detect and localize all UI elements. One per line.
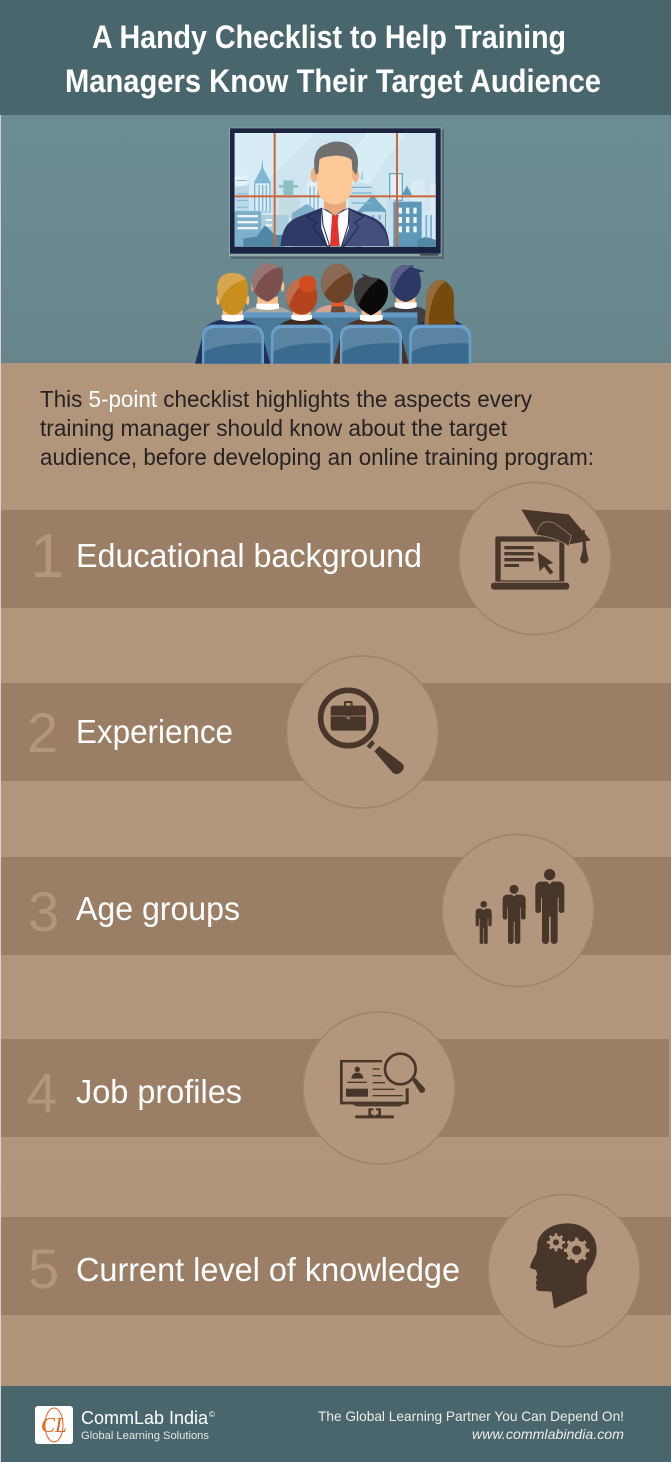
icon: head with gears <box>530 1223 597 1309</box>
number 2: 2 <box>27 701 58 764</box>
panel: item 5 current level of knowledge: Current level of knowledge <box>76 1251 460 1288</box>
panel: item 3 age groups: Age groups <box>76 890 240 927</box>
icon: audience <box>195 263 471 364</box>
title banner: Managers Know Their Target Audience <box>65 63 601 99</box>
tagline and website: The Global Learning Partner You Can Depend On! <box>318 1408 624 1424</box>
logo: CommLab India: CommLab India <box>81 1408 209 1428</box>
icon: wall screen with presenter <box>229 128 444 259</box>
front seats <box>202 325 264 364</box>
icon: magnifier over briefcase <box>321 690 404 774</box>
back row <box>242 307 295 327</box>
number 5: 5 <box>28 1237 59 1300</box>
number 3: 3 <box>28 880 59 943</box>
icon: three growing figures <box>476 869 564 944</box>
panel: item 4 job profiles: Job profiles <box>76 1073 242 1110</box>
panel: item 1 educational background <box>1 482 671 634</box>
panel: item 5 current level of knowledge <box>1 1194 671 1346</box>
presenter <box>281 208 389 246</box>
icon: laptop with graduation cap <box>491 509 591 590</box>
skyline far <box>235 176 247 212</box>
panel: video conference illustration <box>1 115 671 364</box>
logo: CommLab India <box>35 1406 215 1444</box>
panel: item 1 educational background: Educational background <box>76 537 422 574</box>
panel: item 2 experience: Experience <box>76 713 233 750</box>
number 1: 1 <box>30 522 64 591</box>
intro text <box>40 386 594 470</box>
icon: monitor with profile and magnifier <box>340 1054 425 1118</box>
logo: CommLab India: © <box>209 1410 215 1419</box>
intro text: audience, before developing an online training program: <box>40 444 594 470</box>
panel: item 3 age groups <box>1 834 671 986</box>
back seats <box>242 312 417 327</box>
title banner <box>0 0 671 115</box>
front people <box>195 320 270 364</box>
footer <box>1 1386 671 1462</box>
panel: item 2 experience <box>1 656 671 808</box>
tagline and website: www.commlabindia.com <box>472 1426 624 1442</box>
title banner: A Handy Checklist to Help Training <box>92 19 566 55</box>
number 4: 4 <box>26 1061 57 1124</box>
tagline and website <box>318 1408 624 1442</box>
logo: CommLab India: CL <box>41 1413 67 1437</box>
intro text: This 5-point checklist highlights the aspects every <box>40 386 532 412</box>
intro text: training manager should know about the target <box>40 415 508 441</box>
skyline near <box>357 195 387 247</box>
panel: item 4 job profiles <box>1 1012 669 1164</box>
logo: CommLab India: Global Learning Solutions <box>81 1430 209 1442</box>
